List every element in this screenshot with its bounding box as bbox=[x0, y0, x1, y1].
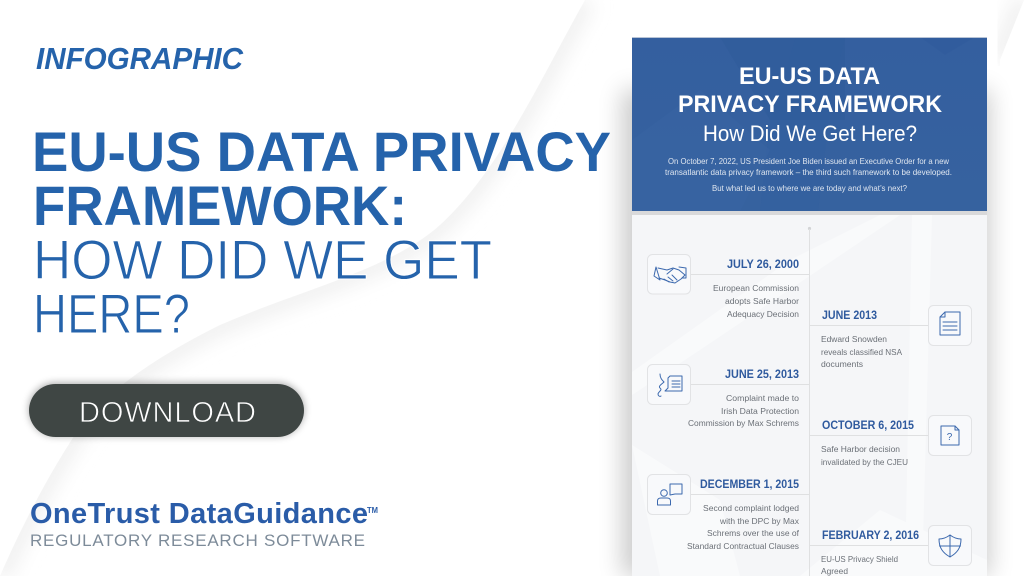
header title bbox=[678, 63, 943, 118]
event: June 2013: reveals classified NSA bbox=[821, 347, 902, 357]
icon: handshake bbox=[654, 267, 686, 283]
icon: question document: ? bbox=[947, 432, 953, 443]
event: June 2013: documents bbox=[821, 359, 863, 369]
event: February 2, 2016 bbox=[810, 526, 972, 576]
main headline: FRAMEWORK: bbox=[33, 174, 407, 237]
main headline: HERE? bbox=[33, 282, 190, 345]
event: October 6, 2015: OCTOBER 6, 2015 bbox=[822, 419, 915, 432]
event: December 1, 2015: Standard Contractual Clauses bbox=[687, 541, 799, 551]
header title: EU-US DATA bbox=[739, 63, 880, 90]
header intro text: But what led us to where we are today and what’s next? bbox=[712, 183, 907, 193]
infographic label: INFOGRAPHIC bbox=[36, 41, 244, 76]
download button: DOWNLOAD bbox=[79, 397, 256, 429]
event: December 1, 2015: DECEMBER 1, 2015 bbox=[700, 478, 800, 491]
event: June 2013 bbox=[810, 306, 972, 369]
header subtitle: How Did We Get Here? bbox=[703, 121, 917, 146]
main headline: EU-US DATA PRIVACY bbox=[32, 120, 611, 183]
header intro text: transatlantic data privacy framework – the third such framework to be developed. bbox=[665, 167, 952, 177]
event: February 2, 2016: Agreed bbox=[821, 566, 848, 576]
event: July 26, 2000: Adequacy Decision bbox=[727, 309, 799, 319]
icon: document bbox=[940, 312, 960, 335]
logo: OneTrust DataGuidance: OneTrust DataGuidance bbox=[30, 498, 368, 530]
event: July 26, 2000: adopts Safe Harbor bbox=[725, 296, 799, 306]
header intro text bbox=[665, 156, 952, 193]
main headline: HOW DID WE GET bbox=[33, 228, 492, 291]
event: December 1, 2015: Second complaint lodged bbox=[703, 503, 799, 513]
logo: OneTrust DataGuidance bbox=[30, 498, 378, 550]
icon: speaking face bbox=[658, 374, 682, 396]
event: June 2013: Edward Snowden bbox=[821, 334, 887, 344]
icon: question document bbox=[941, 426, 959, 445]
event: December 1, 2015: Schrems over the use of bbox=[707, 528, 800, 538]
main headline bbox=[32, 120, 611, 345]
panel header bbox=[632, 37, 987, 215]
event: December 1, 2015: with the DPC by Max bbox=[719, 516, 800, 526]
logo: OneTrust DataGuidance: REGULATORY RESEARCH SOFTWARE bbox=[30, 531, 365, 550]
logo: OneTrust DataGuidance: TM bbox=[367, 506, 378, 515]
event: December 1, 2015 bbox=[648, 474, 809, 551]
event: June 25, 2013: Complaint made to bbox=[726, 393, 799, 403]
event: June 25, 2013: Commission by Max Schrems bbox=[688, 418, 799, 428]
event: February 2, 2016: EU-US Privacy Shield bbox=[821, 554, 898, 564]
event: October 6, 2015 bbox=[810, 416, 972, 467]
icon: person with speech bubble bbox=[658, 484, 682, 505]
panel: infographic preview bbox=[622, 37, 990, 576]
event: June 25, 2013: Irish Data Protection bbox=[721, 406, 799, 416]
timeline spine bbox=[808, 227, 811, 576]
event: July 26, 2000 bbox=[648, 254, 809, 319]
event: July 26, 2000: JULY 26, 2000 bbox=[727, 258, 799, 271]
header intro text: On October 7, 2022, US President Joe Biden issued an Executive Order for a new bbox=[668, 156, 950, 166]
download button bbox=[29, 383, 304, 437]
event: October 6, 2015: Safe Harbor decision bbox=[821, 444, 900, 454]
icon: shield bbox=[939, 535, 961, 557]
event: February 2, 2016: FEBRUARY 2, 2016 bbox=[822, 529, 919, 542]
event: July 26, 2000: European Commission bbox=[713, 283, 799, 293]
event: June 2013: JUNE 2013 bbox=[822, 309, 877, 322]
header title: PRIVACY FRAMEWORK bbox=[678, 91, 943, 118]
event: October 6, 2015: invalidated by the CJEU bbox=[821, 457, 908, 467]
event: June 25, 2013: JUNE 25, 2013 bbox=[725, 368, 800, 381]
event: June 25, 2013 bbox=[648, 364, 809, 428]
